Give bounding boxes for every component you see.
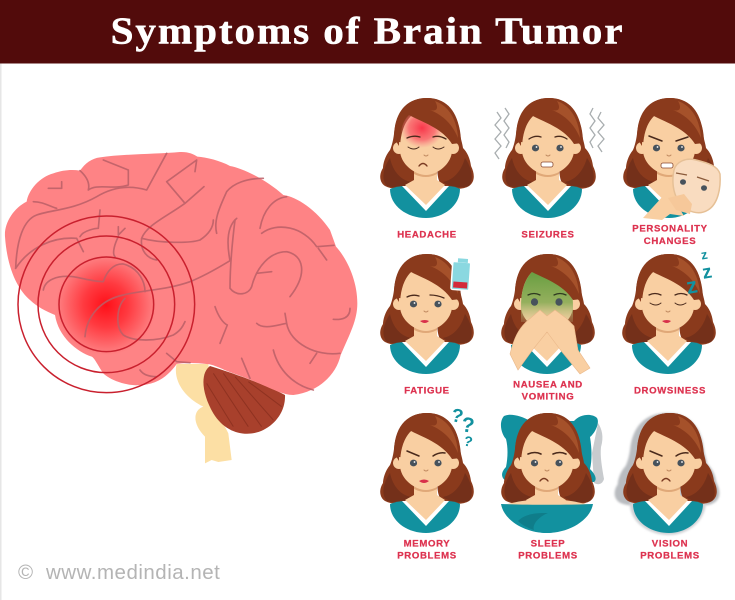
question marks <box>449 405 476 450</box>
zzz: z <box>684 272 699 299</box>
label: headache: HEADACHE <box>397 230 457 240</box>
label: vision problems: PROBLEMS <box>640 550 700 562</box>
cerebellum <box>203 366 285 434</box>
blanket <box>501 499 593 533</box>
pillow <box>501 415 604 484</box>
icon: personality changes <box>623 98 720 220</box>
label: memory problems <box>397 538 457 562</box>
zzz <box>684 247 714 299</box>
question marks: ? <box>460 413 476 438</box>
tumor glow <box>56 255 156 355</box>
label: nausea and vomiting <box>513 380 583 402</box>
fingers <box>668 194 692 214</box>
mask <box>673 159 720 213</box>
label: sleep problems: SLEEP <box>531 538 565 550</box>
title: Symptoms of Brain Tumor <box>111 10 624 52</box>
label: nausea and vomiting: VOMITING <box>522 392 574 402</box>
hands over mouth <box>510 310 590 374</box>
icon: memory problems <box>380 405 476 533</box>
zzz: z <box>701 261 714 284</box>
icon: headache <box>380 98 474 218</box>
hand <box>643 195 684 220</box>
label: drowsiness: DROWSINESS <box>634 386 706 396</box>
icon: fatigue <box>380 254 474 374</box>
cerebrum <box>5 152 357 395</box>
icon: vision problems <box>615 413 719 535</box>
page edge <box>0 63 2 600</box>
question marks: ? <box>449 405 465 428</box>
icon: nausea and vomiting <box>501 254 595 374</box>
label: personality changes: CHANGES <box>644 236 696 247</box>
blur halo <box>615 413 719 535</box>
title <box>0 0 735 64</box>
label: memory problems: MEMORY <box>404 538 450 550</box>
footer credit: © www.medindia.net <box>18 561 220 584</box>
illustration: brain with tumor <box>5 152 357 463</box>
label: vision problems: VISION <box>652 538 688 550</box>
label: seizures: SEIZURES <box>521 230 575 240</box>
label: sleep problems <box>518 538 578 562</box>
battery <box>451 258 471 291</box>
icon: drowsiness <box>622 247 716 374</box>
brain stem <box>176 364 232 463</box>
tumor rings <box>18 216 195 393</box>
icon: sleep problems <box>501 413 604 533</box>
icon: seizures <box>495 98 604 218</box>
label: sleep problems: PROBLEMS <box>518 550 578 562</box>
zzz: z <box>700 247 709 263</box>
label: personality changes: PERSONALITY <box>632 224 708 234</box>
label: vision problems <box>640 538 700 562</box>
label: nausea and vomiting: NAUSEA AND <box>513 380 583 390</box>
label: personality changes <box>632 224 708 247</box>
label: fatigue: FATIGUE <box>404 386 450 396</box>
question marks: ? <box>462 432 474 450</box>
label: memory problems: PROBLEMS <box>397 550 457 562</box>
gyri <box>16 153 350 390</box>
